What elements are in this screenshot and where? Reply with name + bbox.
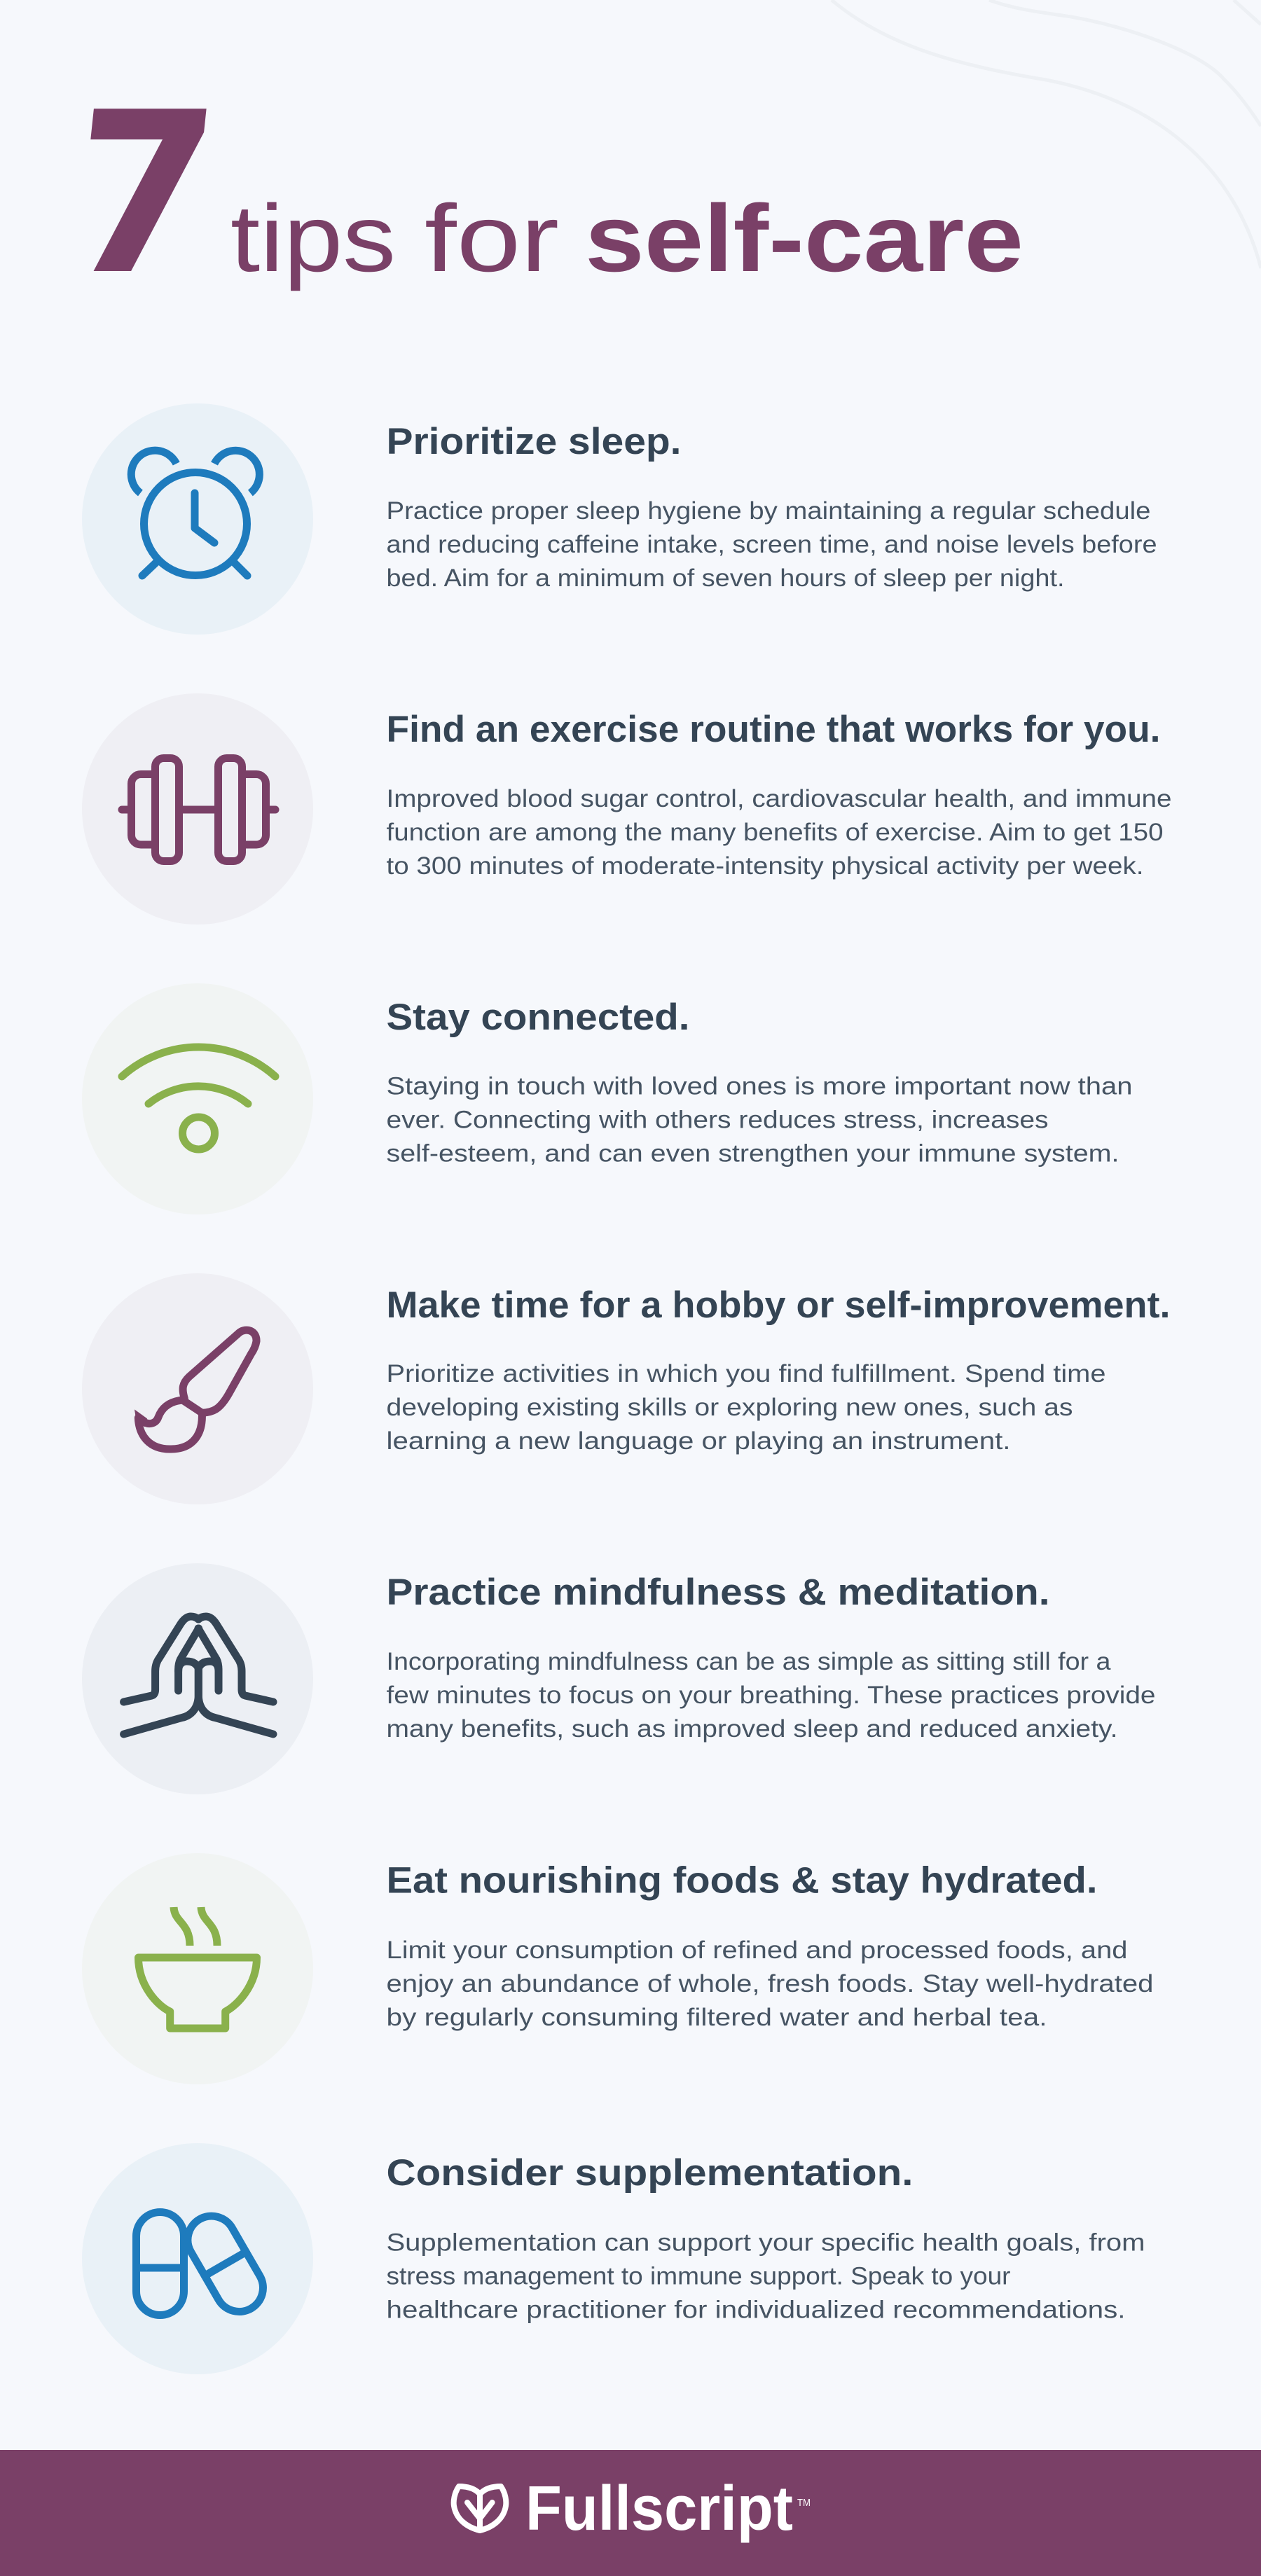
title <box>57 65 1024 324</box>
heading: prioritize sleep: Prioritize sleep. <box>387 421 681 462</box>
text block: prioritize sleep <box>387 497 1157 592</box>
icon: paint brush <box>82 1273 313 1504</box>
icon: dumbbell <box>82 693 313 925</box>
text block: stay connected <box>387 1073 1132 1167</box>
title: 7 <box>57 65 227 324</box>
icon: steaming bowl <box>82 1853 313 2084</box>
text block: exercise routine: Improved blood sugar control, cardiovascular health, and immune <box>387 785 1171 812</box>
footer band <box>0 2450 1261 2576</box>
text block: supplementation: healthcare practitioner for individualized recommendations. <box>387 2296 1125 2324</box>
text block: mindfulness and meditation <box>387 1648 1156 1743</box>
panel: exercise routine <box>82 693 1171 925</box>
title: self-care <box>585 185 1024 291</box>
text block: nourishing foods: enjoy an abundance of whole, fresh foods. Stay well-hydrated <box>387 1970 1153 1997</box>
title: for <box>425 185 559 291</box>
text block: exercise routine: to 300 minutes of moderate-intensity physical activity per week. <box>387 852 1143 880</box>
panel: supplementation <box>82 2143 1145 2374</box>
text block: hobby or self-improvement: Prioritize activities in which you find fulfillment. Spend time <box>387 1360 1105 1387</box>
text block: exercise routine: function are among the many benefits of exercise. Aim to get 150 <box>387 819 1163 846</box>
text block: exercise routine <box>387 785 1171 880</box>
text block: supplementation: stress management to immune support. Speak to your <box>387 2262 1011 2290</box>
text block: hobby or self-improvement <box>387 1360 1105 1455</box>
text block: hobby or self-improvement: learning a new language or playing an instrument. <box>387 1427 1010 1455</box>
text block: supplementation: Supplementation can support your specific health goals, from <box>387 2229 1145 2257</box>
panel: stay connected <box>82 983 1132 1214</box>
icon: capsules <box>82 2143 313 2374</box>
panel: prioritize sleep <box>82 403 1157 635</box>
brand name: Fullscript <box>525 2474 793 2544</box>
text block: nourishing foods: Limit your consumption of refined and processed foods, and <box>387 1937 1128 1964</box>
icon: alarm clock <box>82 403 313 635</box>
heading: stay connected: Stay connected. <box>387 997 689 1038</box>
text block: mindfulness and meditation: many benefits, such as improved sleep and reduced anxiety. <box>387 1715 1118 1743</box>
text block: hobby or self-improvement: developing existing skills or exploring new ones, such as <box>387 1394 1073 1421</box>
heading: supplementation: Consider supplementation. <box>387 2152 914 2194</box>
text block: supplementation <box>387 2229 1145 2324</box>
text block: stay connected: self-esteem, and can even strengthen your immune system. <box>387 1140 1119 1167</box>
text block: stay connected: ever. Connecting with others reduces stress, increases <box>387 1107 1048 1133</box>
icon: fullscript leaf heart logo <box>454 2486 506 2530</box>
heading: hobby or self-improvement: Make time for a hobby or self-improvement. <box>387 1284 1170 1326</box>
heading: exercise routine: Find an exercise routine that works for you. <box>387 709 1160 750</box>
text block: nourishing foods: by regularly consuming filtered water and herbal tea. <box>387 2004 1047 2031</box>
panel: nourishing foods <box>82 1853 1153 2084</box>
panel: hobby or self-improvement <box>82 1273 1170 1504</box>
text block: prioritize sleep: bed. Aim for a minimum of seven hours of sleep per night. <box>387 565 1065 592</box>
text block: nourishing foods <box>387 1937 1153 2031</box>
text block: mindfulness and meditation: few minutes to focus on your breathing. These practices provide <box>387 1682 1156 1709</box>
trademark: TM <box>797 2497 811 2509</box>
icon: praying hands <box>82 1563 313 1794</box>
heading: mindfulness and meditation: Practice mindfulness & meditation. <box>387 1572 1049 1613</box>
text block: stay connected: Staying in touch with loved ones is more important now than <box>387 1073 1132 1100</box>
panel: mindfulness and meditation <box>82 1563 1156 1794</box>
text block: prioritize sleep: and reducing caffeine intake, screen time, and noise levels before <box>387 531 1157 558</box>
text block: mindfulness and meditation: Incorporating mindfulness can be as simple as sitting still for a <box>387 1648 1111 1675</box>
text block: prioritize sleep: Practice proper sleep hygiene by maintaining a regular schedule <box>387 497 1150 525</box>
title: tips <box>230 185 396 291</box>
icon: wifi signal <box>82 983 313 1214</box>
heading: nourishing foods: Eat nourishing foods & stay hydrated. <box>387 1860 1097 1901</box>
